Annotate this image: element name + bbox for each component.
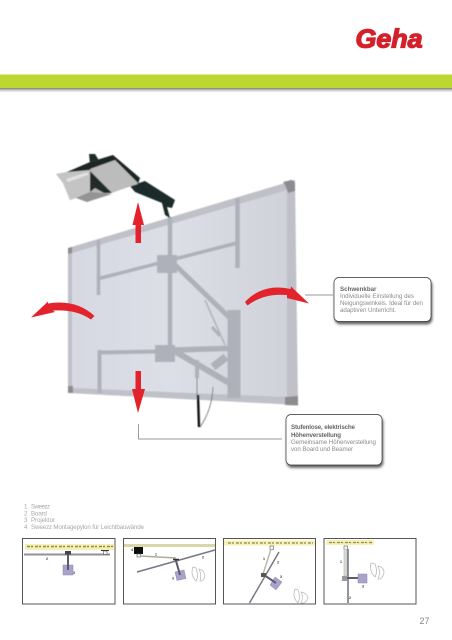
diagram 4: 2 bbox=[349, 596, 351, 600]
diagram 2: 1 bbox=[155, 552, 157, 556]
diagram 4: 1 bbox=[340, 560, 342, 564]
arrow: up bbox=[132, 202, 144, 243]
arrow: down bbox=[132, 371, 145, 413]
callout: Höhenverstellung: von Board und Beamer bbox=[291, 446, 353, 453]
callout: Schwenkbar bbox=[334, 278, 431, 322]
leader line: Schwenkbar bbox=[305, 294, 333, 296]
board frame bbox=[68, 180, 298, 405]
callout: Höhenverstellung bbox=[286, 414, 382, 465]
board with mount bbox=[68, 180, 298, 427]
callout: Schwenkbar: Schwenkbar bbox=[340, 286, 377, 293]
diagram 1: 3 bbox=[73, 571, 75, 575]
diagram 1: 2 bbox=[46, 557, 48, 561]
projector arm bbox=[130, 181, 175, 218]
callout: Höhenverstellung: Höhenverstellung bbox=[291, 432, 341, 439]
diagram 2: 2 bbox=[202, 556, 204, 560]
wall mount silhouette bbox=[97, 198, 240, 398]
leader line: Höhenverstellung bbox=[138, 424, 282, 439]
legend list: 3 bbox=[24, 517, 28, 524]
diagram 3: 3 bbox=[280, 575, 282, 579]
page number: 27 bbox=[420, 616, 430, 626]
projector mount spike bbox=[89, 154, 100, 164]
legend list bbox=[24, 504, 145, 531]
callout: Höhenverstellung: Stufenlose, elektrische bbox=[291, 424, 356, 431]
board surface bbox=[72, 190, 287, 397]
projector dark top edge bbox=[67, 155, 140, 184]
diagram 2: 3 bbox=[172, 576, 174, 580]
arrow: swing right bbox=[245, 286, 309, 306]
callout: Schwenkbar: adaptiven Unterricht. bbox=[340, 307, 396, 314]
legend list: Sweezz bbox=[31, 504, 50, 510]
logo: Geha: Geha bbox=[356, 24, 422, 54]
diagram 3: 1 bbox=[263, 557, 265, 561]
projector lens wedge bbox=[90, 171, 112, 193]
callout: Schwenkbar: Neigungswinkels. Ideal für den bbox=[340, 300, 424, 307]
diagram 1 bbox=[22, 538, 115, 604]
board corners bbox=[68, 180, 298, 406]
legend list: 1 bbox=[24, 504, 28, 510]
mount clamps bbox=[155, 255, 177, 362]
legend list: Sweezz Montagepylon für Leichtbauwände bbox=[31, 524, 145, 531]
projector lower lip bbox=[76, 192, 112, 202]
projector bbox=[56, 154, 175, 218]
diagram 2: 4 bbox=[131, 548, 133, 552]
diagram 4 bbox=[324, 538, 416, 604]
diagram 4: 3 bbox=[362, 584, 364, 588]
header bar bbox=[0, 74, 452, 92]
callout: Höhenverstellung: Gemeinsame Höhenverstellung bbox=[291, 439, 377, 446]
arrow: swing left bbox=[31, 302, 94, 320]
legend list: Board bbox=[31, 510, 48, 517]
legend list: 2 bbox=[24, 510, 28, 517]
diagram 2 bbox=[124, 538, 216, 604]
projector left panel bbox=[56, 170, 90, 200]
legend list: 4 bbox=[24, 524, 28, 531]
diagram 3 bbox=[224, 538, 316, 604]
power cable bbox=[197, 378, 213, 427]
projector main panel bbox=[90, 160, 138, 193]
projector body silhouette bbox=[56, 155, 140, 202]
legend list: Projektor bbox=[31, 517, 55, 524]
diagram 3: 2 bbox=[277, 560, 279, 564]
callout: Schwenkbar: Individuelle Einstellung des bbox=[340, 293, 414, 300]
